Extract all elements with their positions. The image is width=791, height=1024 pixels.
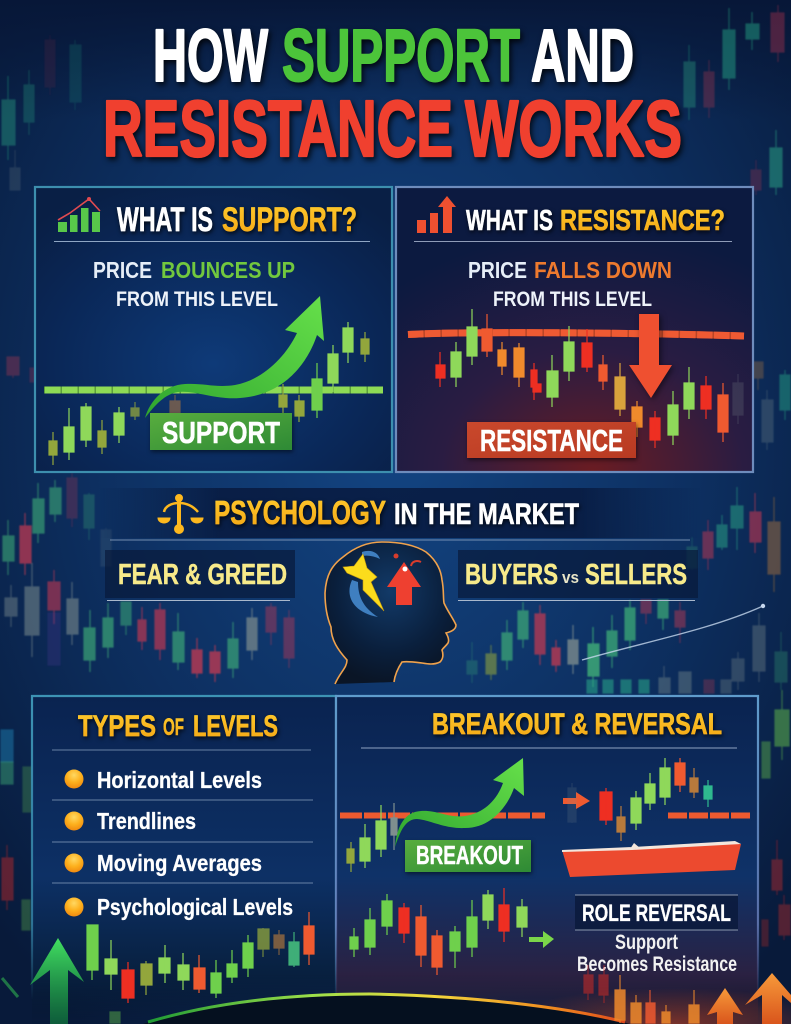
red ribbon shape [562, 841, 741, 877]
text box: buyers vs sellers [458, 550, 698, 600]
icon: blue arcs [349, 551, 380, 617]
icon: red bars with arrow [417, 196, 456, 233]
bottom glow and dark floor [143, 964, 791, 1024]
title [103, 14, 682, 173]
heading [78, 710, 278, 743]
heading: RESISTANCE? [560, 205, 725, 237]
heading [117, 201, 357, 239]
heading: SUPPORT? [222, 201, 357, 239]
heading: WHAT IS [117, 201, 213, 239]
background candles: right side [7, 357, 790, 693]
heading: PSYCHOLOGY [214, 494, 386, 531]
panel: what is support [35, 187, 392, 472]
text box: buyers vs sellers: BUYERS [465, 559, 558, 591]
panel: breakout and reversal [336, 696, 758, 1024]
candles: support chart [49, 322, 369, 465]
arrow: small green right [529, 931, 554, 948]
heading: IN THE MARKET [394, 498, 579, 531]
list item: psychological levels: Psychological Levels [97, 894, 293, 920]
panel: what is resistance [396, 187, 753, 472]
icon: scales [158, 494, 203, 534]
text box: fear and greed: FEAR & GREED [118, 559, 287, 591]
text: price falls down: FALLS DOWN [534, 257, 672, 283]
text box: buyers vs sellers: vs [562, 568, 579, 587]
reversal level line [668, 812, 750, 818]
panel: types of levels [32, 696, 336, 1024]
background candles: left side [3, 473, 294, 682]
label: role reversal: ROLE REVERSAL [582, 900, 731, 927]
icon: red arrow [387, 554, 421, 605]
trendline [582, 604, 765, 660]
title: SUPPORT [282, 14, 520, 97]
candles: reversal chart [568, 758, 712, 841]
candles: breakout chart [347, 803, 397, 872]
text: price bounces up: BOUNCES UP [161, 257, 295, 283]
text: price bounces up: FROM THIS LEVEL [116, 288, 278, 311]
text: support becomes resistance: Support [615, 931, 678, 954]
heading [214, 494, 579, 531]
background candles: top [2, 5, 784, 195]
arrow: breakout [395, 758, 524, 847]
candles: resistance chart [436, 309, 743, 448]
label: resistance: RESISTANCE [480, 423, 623, 458]
list item: trendlines [64, 808, 196, 834]
title: HOW [153, 14, 268, 97]
label: breakout [405, 840, 531, 872]
candles: role reversal chart [350, 888, 527, 975]
text box: buyers vs sellers: SELLERS [585, 559, 687, 591]
title: AND [531, 14, 634, 97]
resistance level line [408, 333, 744, 336]
heading [466, 205, 725, 237]
candles: types panel bottom chart [87, 912, 314, 1023]
text: price bounces up: PRICE [93, 257, 152, 283]
title: WORKS [465, 84, 682, 173]
arrow: falls down [629, 314, 672, 398]
icon: lightning bolt [343, 554, 384, 611]
background candles: lower edges [1, 690, 790, 946]
arrow: bounce up [145, 296, 324, 418]
label: support: SUPPORT [162, 415, 280, 450]
title: RESISTANCE [103, 84, 453, 173]
arrow: small orange right [563, 792, 590, 809]
label: role reversal [575, 895, 738, 930]
list item: trendlines: Trendlines [97, 808, 196, 834]
arrows: orange up bottom right [707, 973, 791, 1024]
heading: LEVELS [193, 710, 278, 743]
breakout level line [340, 812, 545, 818]
text: price falls down [468, 257, 672, 311]
heading: TYPES [78, 710, 156, 743]
text: support becomes resistance: Becomes Resistance [577, 953, 737, 976]
heading: OF [163, 714, 184, 741]
head illustration [325, 542, 456, 684]
list item: horizontal levels: Horizontal Levels [97, 767, 262, 793]
text: support becomes resistance [577, 931, 737, 976]
list item: moving averages: Moving Averages [97, 850, 262, 876]
text: price bounces up [93, 257, 295, 311]
text: price falls down: FROM THIS LEVEL [493, 288, 652, 311]
heading: WHAT IS [466, 205, 553, 237]
icon: green bars with trend [58, 197, 100, 232]
arrow: green up bottom left [2, 938, 84, 1024]
support level line [44, 384, 383, 396]
candles: bottom right chart [584, 965, 699, 1023]
label: breakout: BREAKOUT [416, 840, 523, 870]
text: price falls down: PRICE [468, 257, 527, 283]
text box: fear and greed [105, 550, 295, 600]
panel: psychology in the market [100, 488, 700, 684]
